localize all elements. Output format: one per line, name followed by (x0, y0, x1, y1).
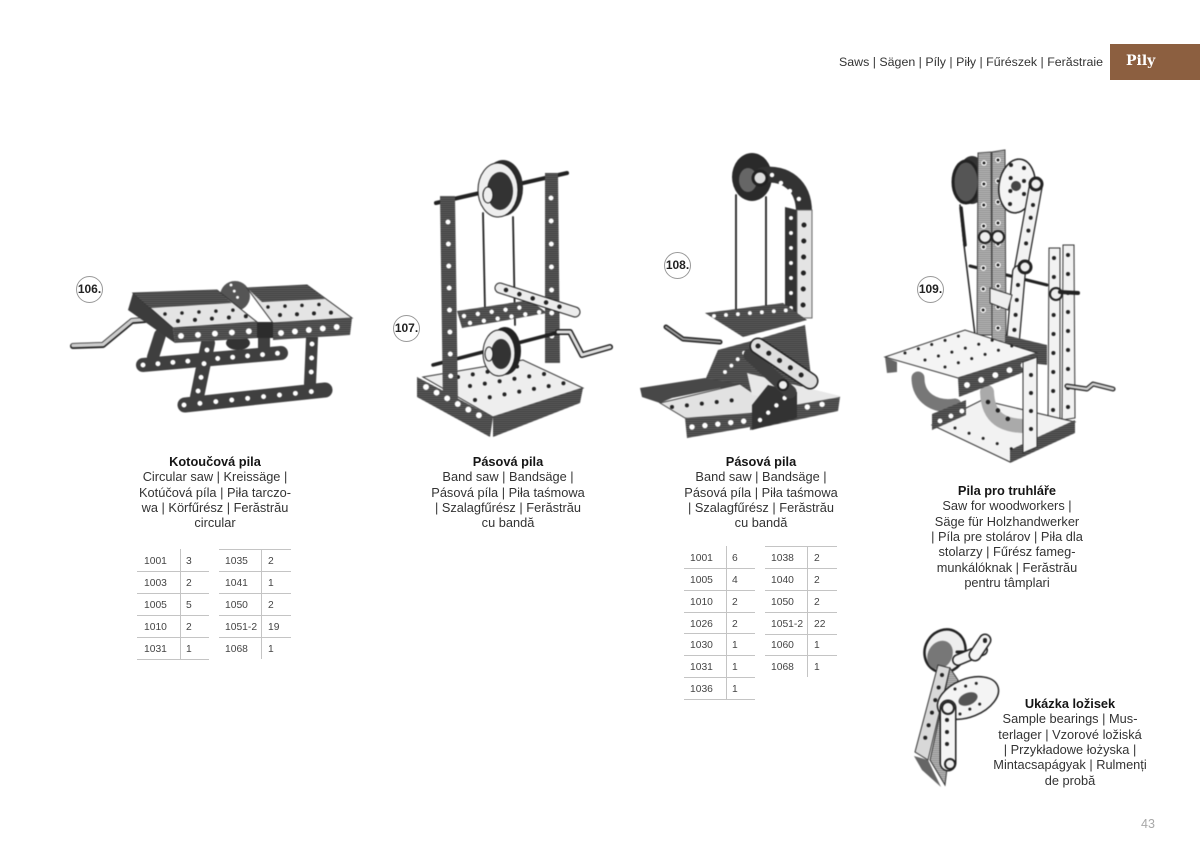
parts table 106: 1031 (144, 644, 167, 655)
parts table 106: 2 (268, 556, 274, 567)
parts table 108: 22 (814, 619, 825, 630)
illustration: circular saw model (69, 280, 354, 414)
parts table 108: 2 (814, 553, 820, 564)
caption: band saw: | Szalagfűrész | Ferăstrău (435, 500, 581, 515)
panel: model 106 circular saw (69, 276, 354, 660)
caption: saw for woodworkers: pentru tâmplari (964, 575, 1050, 590)
panel: model 107 band saw (393, 159, 614, 530)
parts table 106: 1 (268, 578, 274, 589)
parts table 108: 1050 (771, 597, 794, 608)
caption: circular saw: Kotúčová píla | Piła tarczo- (139, 485, 291, 500)
section title tab: Pily (1110, 44, 1200, 80)
parts table 108: 2 (732, 619, 738, 630)
page number: 43 (1141, 817, 1155, 831)
caption: band saw: Band saw | Bandsäge | (442, 469, 574, 484)
caption: saw for woodworkers: Saw for woodworkers | (942, 498, 1072, 513)
parts table 108 (684, 546, 837, 700)
parts table 106: 1 (186, 644, 192, 655)
caption: band saw: cu bandă (482, 515, 534, 530)
parts table 108: 2 (814, 597, 820, 608)
illustration: band saw model (416, 159, 614, 438)
parts table 108: 1 (814, 662, 820, 673)
parts table 106: 1001 (144, 556, 167, 567)
parts table 108: 1 (732, 662, 738, 673)
caption: sample bearings: terlager | Vzorové ložiská (998, 727, 1142, 742)
caption: sample bearings: | Przykładowe łożyska | (1004, 742, 1136, 757)
caption: circular saw (139, 454, 291, 530)
caption: saw for woodworkers: Säge für Holzhandwerker (935, 514, 1079, 529)
caption: saw for woodworkers (931, 483, 1083, 590)
caption: band saw (684, 454, 838, 530)
number badge 106 (76, 276, 103, 303)
caption: sample bearings: Mintacsapágyak | Rulmenți (993, 757, 1147, 772)
parts table 108: 6 (732, 553, 738, 564)
caption: band saw: Band saw | Bandsäge | (695, 469, 827, 484)
parts table 108: 1001 (690, 553, 713, 564)
caption: circular saw: wa | Körfűrész | Ferăstrău (142, 500, 288, 515)
caption: band saw (431, 454, 585, 530)
section title tab: Pily: Pily (1126, 53, 1155, 69)
parts table 108: 1 (732, 684, 738, 695)
parts table 108: 2 (732, 597, 738, 608)
parts table 108: 1038 (771, 553, 794, 564)
illustration: woodworker saw model (883, 148, 1116, 464)
caption: sample bearings: Ukázka ložisek (1025, 696, 1115, 711)
parts table 108: 1031 (690, 662, 713, 673)
parts table 106: 1010 (144, 622, 167, 633)
parts table 108: 1026 (690, 619, 713, 630)
illustration: sample bearing detail (914, 627, 1000, 787)
number badge 108 (664, 252, 691, 279)
parts table 108: 1060 (771, 640, 794, 651)
panel: sample bearings (914, 627, 1147, 788)
caption: band saw: Pásová píla | Piła taśmowa (684, 485, 838, 500)
caption: sample bearings (993, 696, 1147, 788)
parts table 106: 1041 (225, 578, 248, 589)
parts table 108: 1051-2 (771, 619, 803, 630)
parts table 106 (137, 549, 291, 660)
parts table 106: 2 (186, 578, 192, 589)
caption: band saw: cu bandă (735, 515, 787, 530)
parts table 108: 1 (814, 640, 820, 651)
parts table 106: 1003 (144, 578, 167, 589)
parts table 106: 3 (186, 556, 192, 567)
parts table 106: 5 (186, 600, 192, 611)
caption: saw for woodworkers: munkálóknak | Ferăstrău (937, 560, 1077, 575)
parts table 106: 1068 (225, 644, 248, 655)
caption: circular saw: Circular saw | Kreissäge | (143, 469, 287, 484)
caption: saw for woodworkers: stolarzy | Fűrész fameg- (938, 544, 1076, 559)
caption: band saw: Pásová píla | Piła taśmowa (431, 485, 585, 500)
parts table 106: 1035 (225, 556, 248, 567)
parts table 108: 1030 (690, 640, 713, 651)
number badge 108: 108. (666, 258, 689, 272)
caption: band saw: | Szalagfűrész | Ferăstrău (688, 500, 834, 515)
section label: languages: Saws | Sägen | Píly | Piły | Fűrészek | Ferăstraie (839, 55, 1103, 69)
panel: model 109 saw for woodworkers (883, 148, 1116, 590)
parts table 108: 1068 (771, 662, 794, 673)
parts table 108: 1 (732, 640, 738, 651)
number badge 106: 106. (78, 282, 101, 296)
parts table 106: 19 (268, 622, 279, 633)
caption: band saw: Pásová pila (473, 454, 543, 469)
caption: sample bearings: Sample bearings | Mus- (1003, 711, 1137, 726)
parts table 108: 2 (814, 575, 820, 586)
parts table 108: 1036 (690, 684, 713, 695)
parts table 108: 1010 (690, 597, 713, 608)
parts table 108: 1005 (690, 575, 713, 586)
parts table 108: 4 (732, 575, 738, 586)
caption: sample bearings: de probă (1045, 773, 1095, 788)
caption: saw for woodworkers: | Píla pre stolárov | Piła dla (931, 529, 1083, 544)
parts table 108: 1040 (771, 575, 794, 586)
illustration: band saw model with curved arm (639, 152, 841, 439)
number badge 107: 107. (395, 321, 418, 335)
caption: circular saw: circular (194, 515, 236, 530)
panel: model 108 band saw (639, 152, 841, 700)
parts table 106: 1 (268, 644, 274, 655)
number badge 107 (393, 315, 420, 342)
parts table 106: 1005 (144, 600, 167, 611)
caption: band saw: Pásová pila (726, 454, 796, 469)
parts table 106: 1051-2 (225, 622, 257, 633)
caption: circular saw: Kotoučová pila (169, 454, 261, 469)
parts table 106: 2 (268, 600, 274, 611)
parts table 106: 1050 (225, 600, 248, 611)
number badge 109: 109. (919, 282, 942, 296)
parts table 106: 2 (186, 622, 192, 633)
caption: saw for woodworkers: Pila pro truhláře (958, 483, 1056, 498)
number badge 109 (917, 276, 944, 303)
